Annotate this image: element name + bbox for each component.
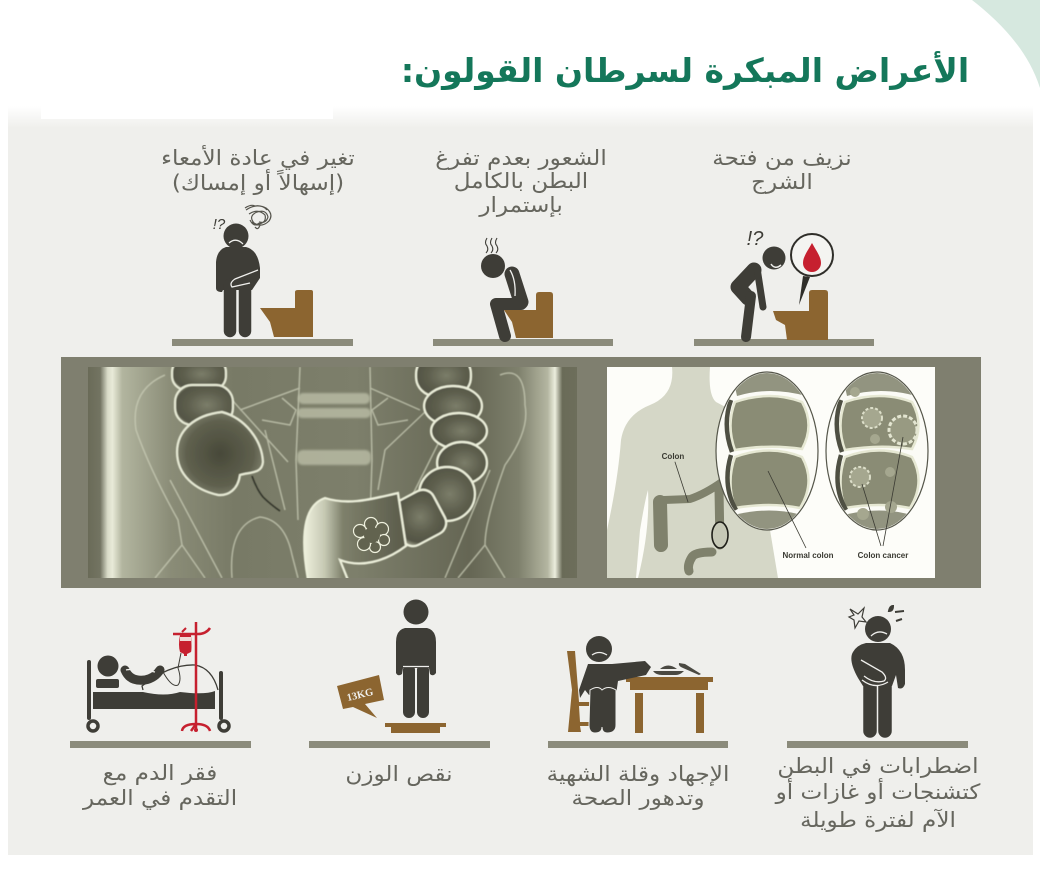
icon: pain star	[849, 608, 866, 628]
icon: plate and spoon	[653, 663, 701, 675]
label: تغير في عادة الأمعاء	[161, 145, 355, 171]
shelf	[309, 741, 490, 748]
icon: scale	[385, 723, 446, 733]
label	[547, 763, 729, 811]
shelf	[172, 339, 353, 346]
icon: toilet	[260, 290, 313, 337]
label	[82, 762, 237, 811]
label: نقص الوزن	[345, 763, 453, 787]
text: normal colon: Normal colon	[782, 551, 834, 560]
icon: blood bubble	[791, 234, 833, 305]
shelf	[694, 339, 874, 346]
symptom: incomplete emptying	[433, 147, 613, 346]
icon: weight sign: 13KG	[346, 687, 374, 704]
icon: confused scribble	[245, 205, 271, 229]
oval: colon cancer	[826, 372, 928, 530]
icon: hospital bed with patient	[88, 653, 229, 731]
central image band	[61, 355, 981, 588]
icon: toilet	[773, 290, 828, 340]
icon: weight sign	[337, 675, 384, 718]
icon: table	[626, 677, 713, 733]
symptom: change in bowel habit	[161, 145, 355, 346]
shelf	[787, 741, 968, 748]
decorative corner	[972, 0, 1040, 88]
icon: toilet	[504, 292, 553, 338]
label: البطن بالكامل	[454, 170, 588, 194]
shelf	[70, 741, 251, 748]
torso silhouette	[607, 367, 778, 578]
icon: chair	[567, 651, 590, 732]
symptom: fatigue and loss of appetite	[547, 636, 729, 811]
symptom: abdominal disturbances	[775, 606, 981, 833]
label: الشرج	[751, 171, 813, 195]
text: exclamation: !?	[213, 216, 226, 233]
oval: normal colon	[716, 372, 818, 530]
colon in body	[660, 462, 728, 571]
shelf	[433, 339, 613, 346]
icon: bent figure	[738, 246, 786, 337]
symptom: weight loss	[309, 600, 490, 787]
shelf	[548, 741, 728, 748]
symptom: anaemia with age	[70, 622, 251, 811]
icon: sweat drops	[889, 606, 904, 621]
label: (إسهالاً أو إمساك)	[172, 169, 344, 196]
icon: standing figure	[216, 224, 260, 331]
tumour	[354, 518, 390, 552]
descending colon	[304, 355, 487, 580]
label: فقر الدم مع	[103, 762, 217, 786]
label: الإجهاد وقلة الشهية	[547, 763, 729, 787]
text: exclamation: !?	[747, 228, 764, 250]
label: الشعور بعدم تفرغ	[435, 147, 607, 171]
vertebrae	[297, 393, 371, 465]
label: وتدهور الصحة	[571, 787, 705, 811]
label: التقدم في العمر	[82, 787, 237, 811]
label	[161, 145, 355, 196]
icon: drip stand and blood bag	[173, 622, 210, 732]
text: colon cancer: Colon cancer	[858, 551, 908, 560]
pelvis and spine lines	[135, 367, 526, 578]
label: الآم لفترة طويلة	[800, 808, 956, 833]
symptom: rectal bleeding	[694, 147, 874, 346]
text: colon: Colon	[662, 452, 684, 461]
label	[775, 755, 981, 833]
image: x-ray colon with tumour	[88, 355, 577, 580]
image: colon diagram	[607, 367, 935, 578]
label	[712, 147, 852, 195]
ascending colon	[172, 358, 280, 511]
icon: seated figure	[579, 636, 651, 733]
leader lines	[768, 437, 903, 548]
icon: standing figure	[396, 600, 436, 712]
icon: seated figure	[481, 254, 521, 336]
label	[435, 147, 607, 218]
label: اضطرابات في البطن	[777, 755, 979, 779]
icon: stress lines	[486, 238, 498, 253]
label: كتشنجات أو غازات أو	[775, 778, 981, 805]
label: بإستمرار	[478, 194, 563, 218]
icon: pain figure	[851, 616, 905, 731]
label: نزيف من فتحة	[712, 147, 852, 171]
title: الأعراض المبكرة لسرطان القولون:	[401, 50, 969, 91]
